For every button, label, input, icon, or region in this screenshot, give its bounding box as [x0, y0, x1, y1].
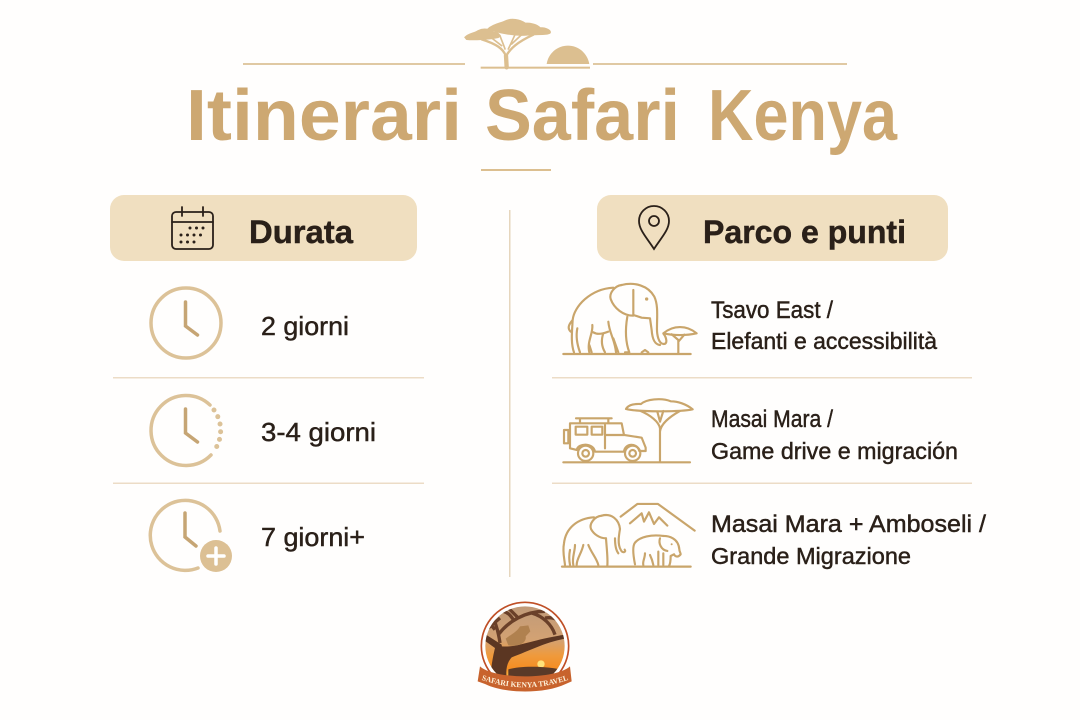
- logo text: SAFARI KENYA TRAVEL: [482, 676, 568, 688]
- label: tsavo east: Tsavo East /: [711, 297, 833, 324]
- icon: clock 2 days: [151, 288, 221, 358]
- icon: clock 3-4 days: [151, 395, 221, 465]
- label: 7 giorni+: 7 giorni+: [261, 522, 365, 552]
- panel: parco e punti: [552, 195, 986, 569]
- column divider: [509, 210, 510, 577]
- title: Itinerari: [186, 76, 462, 156]
- label: grande migrazione: Grande Migrazione: [711, 543, 911, 569]
- icon: elephants and kilimanjaro: [562, 504, 695, 567]
- logo: safari kenya travel: [478, 602, 572, 692]
- label: 3-4 giorni: 3-4 giorni: [261, 417, 376, 447]
- title: Safari: [485, 76, 680, 156]
- panel: durata: [110, 195, 424, 572]
- title: [186, 76, 898, 156]
- heading pill: parco: [597, 195, 948, 261]
- label: elefanti e accessibilita: Elefanti e accessibilità: [711, 328, 937, 354]
- header emblem: acacia tree and sun: [465, 20, 590, 69]
- icon: calendar: [172, 207, 213, 249]
- header rule right: [593, 63, 847, 65]
- header rule left: [243, 63, 465, 65]
- heading pill: durata: [110, 195, 417, 261]
- icon: clock with plus: [150, 500, 232, 572]
- label: game drive: Game drive e migración: [711, 438, 958, 464]
- title: Kenya: [708, 76, 898, 156]
- label: masai mara + amboseli: Masai Mara + Amboseli /: [711, 511, 986, 538]
- label: 2 giorni: 2 giorni: [261, 311, 349, 341]
- icon: safari jeep and acacia: [563, 399, 693, 462]
- title underline: [481, 169, 551, 171]
- heading: durata: Durata: [249, 214, 353, 250]
- label: masai mara: Masai Mara /: [711, 406, 833, 433]
- icon: elephant with acacia: [563, 284, 697, 354]
- icon: map pin: [639, 206, 669, 249]
- heading: parco e punti: Parco e punti: [703, 214, 906, 250]
